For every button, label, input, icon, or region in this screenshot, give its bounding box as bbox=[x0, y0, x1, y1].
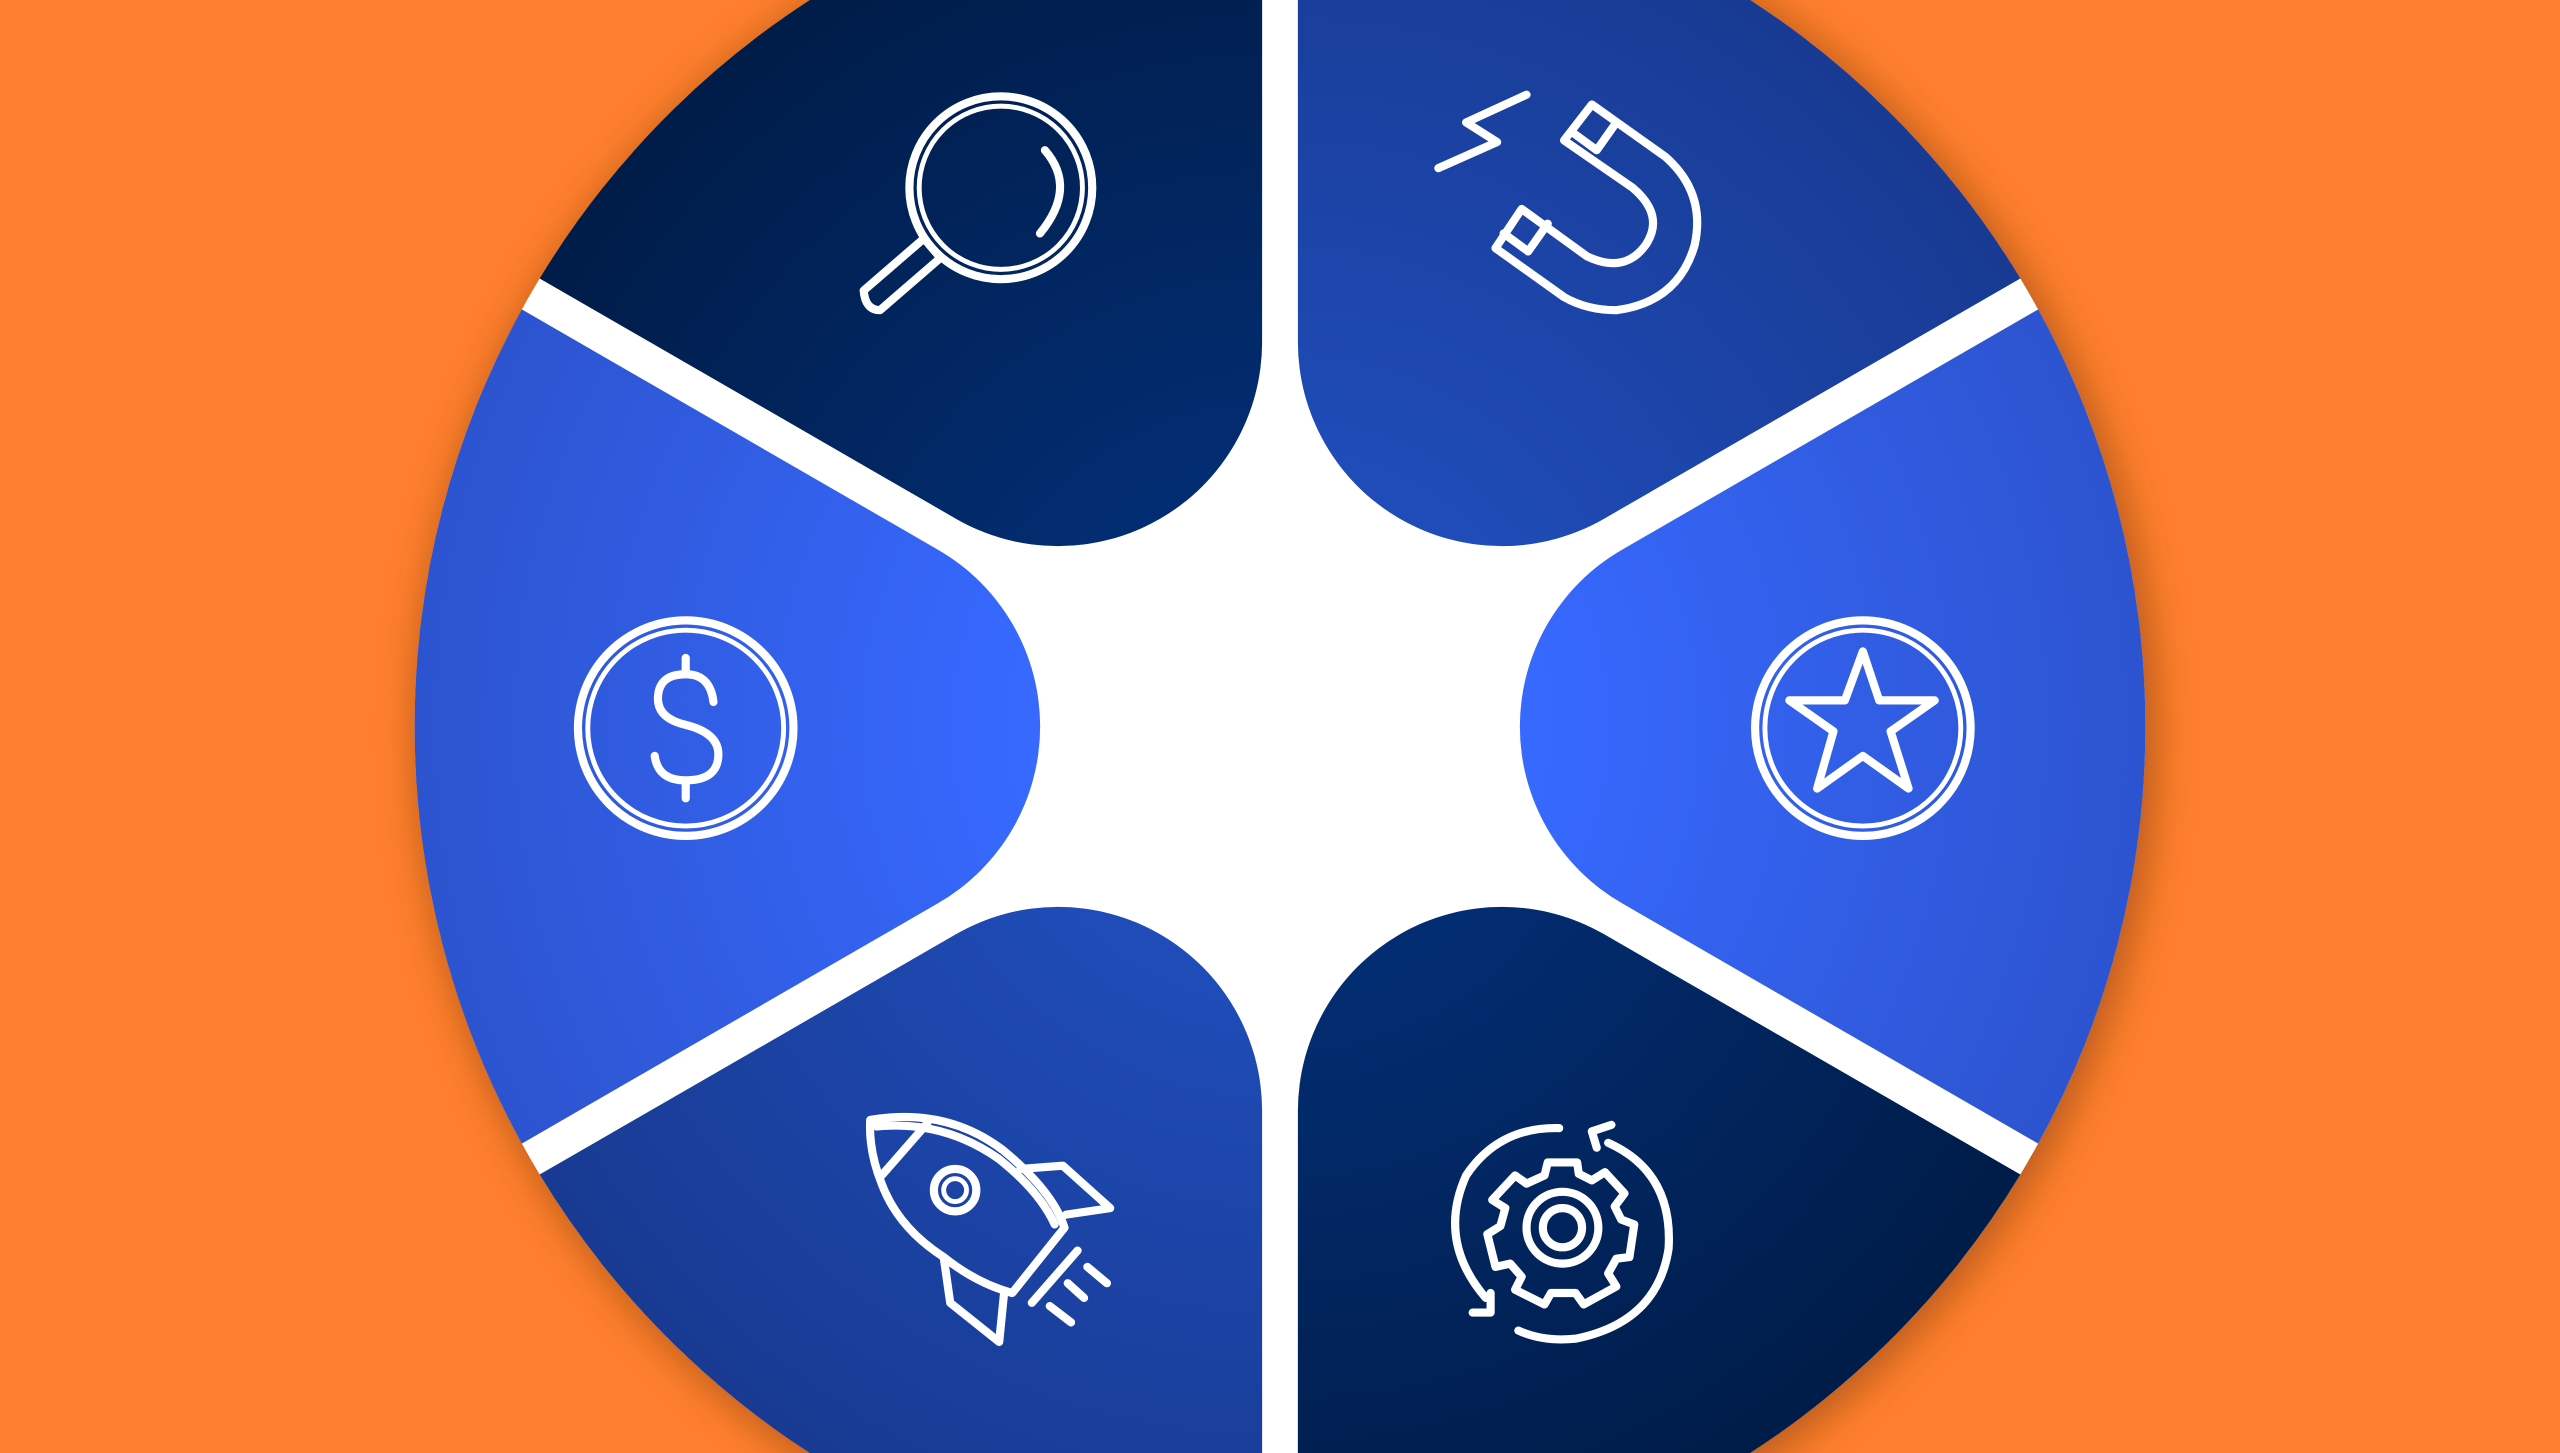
segment: top-left navy bbox=[540, 0, 1262, 546]
segment: top-right blue bbox=[1298, 0, 2020, 546]
circle shadow bbox=[418, 0, 2155, 1453]
segment: bottom-left blue bbox=[540, 906, 1262, 1453]
segment: right bright bbox=[1520, 309, 2145, 1144]
segment: left bright bbox=[415, 309, 1040, 1144]
white wheel base bbox=[415, 0, 2145, 1453]
icon: magnifier bbox=[864, 96, 1092, 310]
icon: rocket bbox=[870, 1117, 1110, 1342]
icon: dollar bbox=[578, 620, 793, 836]
infographic wheel bbox=[395, 0, 2178, 1453]
segment: bottom-right navy bbox=[1298, 906, 2020, 1453]
icon: star bbox=[1755, 620, 1971, 836]
segments bbox=[415, 0, 2145, 1453]
icon: magnet bbox=[1438, 95, 1697, 310]
icon: gear cycle bbox=[1455, 1125, 1669, 1339]
